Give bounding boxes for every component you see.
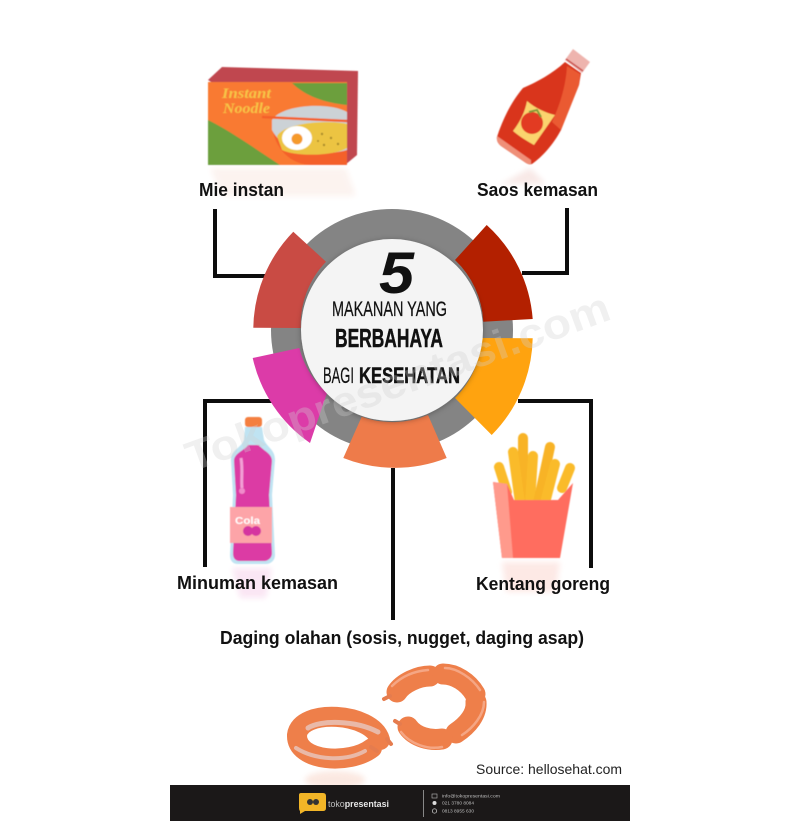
connector lines bbox=[205, 208, 591, 620]
title line 3 bold: KESEHATAN bbox=[359, 363, 460, 388]
segment: saos kemasan bbox=[455, 225, 533, 322]
title line 2: BERBAHAYA bbox=[335, 323, 443, 353]
segment: daging olahan bbox=[343, 415, 447, 468]
footer brand name: tokopresentasi bbox=[328, 799, 389, 810]
watermark: Tokopresentasi.com bbox=[179, 283, 616, 480]
footer contact details: info@tokopresentasi.com bbox=[442, 794, 500, 798]
infographic hub bbox=[253, 209, 533, 468]
box reflection bbox=[210, 168, 356, 196]
grey ring bbox=[271, 209, 513, 451]
label: kentang goreng: Kentang goreng bbox=[476, 574, 610, 594]
footer bar bbox=[170, 785, 630, 821]
label: mie instan: Mie instan bbox=[199, 180, 284, 200]
sausage reflection bbox=[305, 771, 365, 789]
footer logo icon bbox=[299, 793, 326, 814]
label: saos kemasan: Saos kemasan bbox=[477, 180, 598, 200]
segment: kentang goreng bbox=[455, 338, 533, 435]
cola reflection bbox=[232, 568, 272, 598]
icon: instant noodle box bbox=[208, 67, 358, 196]
footer contact details: 021 3780 8084 bbox=[442, 800, 475, 806]
label: daging olahan: Daging olahan (sosis, nugget, daging asap) bbox=[220, 628, 584, 648]
source: Source: hellosehat.com bbox=[476, 761, 622, 777]
footer contact details bbox=[432, 794, 500, 814]
label: minuman kemasan: Minuman kemasan bbox=[177, 573, 338, 593]
centre disc bbox=[301, 239, 483, 421]
box lettering: Instant bbox=[221, 86, 272, 102]
footer contact details: 0813 8955 630 bbox=[442, 808, 475, 814]
title line 1: MAKANAN YANG bbox=[332, 298, 447, 321]
icon: cola bottle bbox=[230, 417, 275, 598]
icon: french fries bbox=[493, 438, 573, 592]
sausage links bbox=[384, 668, 484, 748]
segment: mie instan bbox=[253, 232, 326, 328]
icon: instant noodle box: Noodle bbox=[222, 101, 270, 117]
sausage coil bbox=[296, 717, 391, 759]
title bbox=[323, 241, 460, 388]
title line 3: BAGI bbox=[323, 363, 354, 388]
fries reflection bbox=[502, 562, 560, 592]
segment: minuman kemasan bbox=[253, 348, 327, 443]
title numeral: 5 bbox=[379, 241, 415, 306]
bottle reflection bbox=[498, 168, 546, 184]
icon: sausages bbox=[296, 668, 484, 789]
icon: ketchup bottle bbox=[497, 49, 590, 184]
bottle label text: Cola bbox=[235, 516, 261, 527]
